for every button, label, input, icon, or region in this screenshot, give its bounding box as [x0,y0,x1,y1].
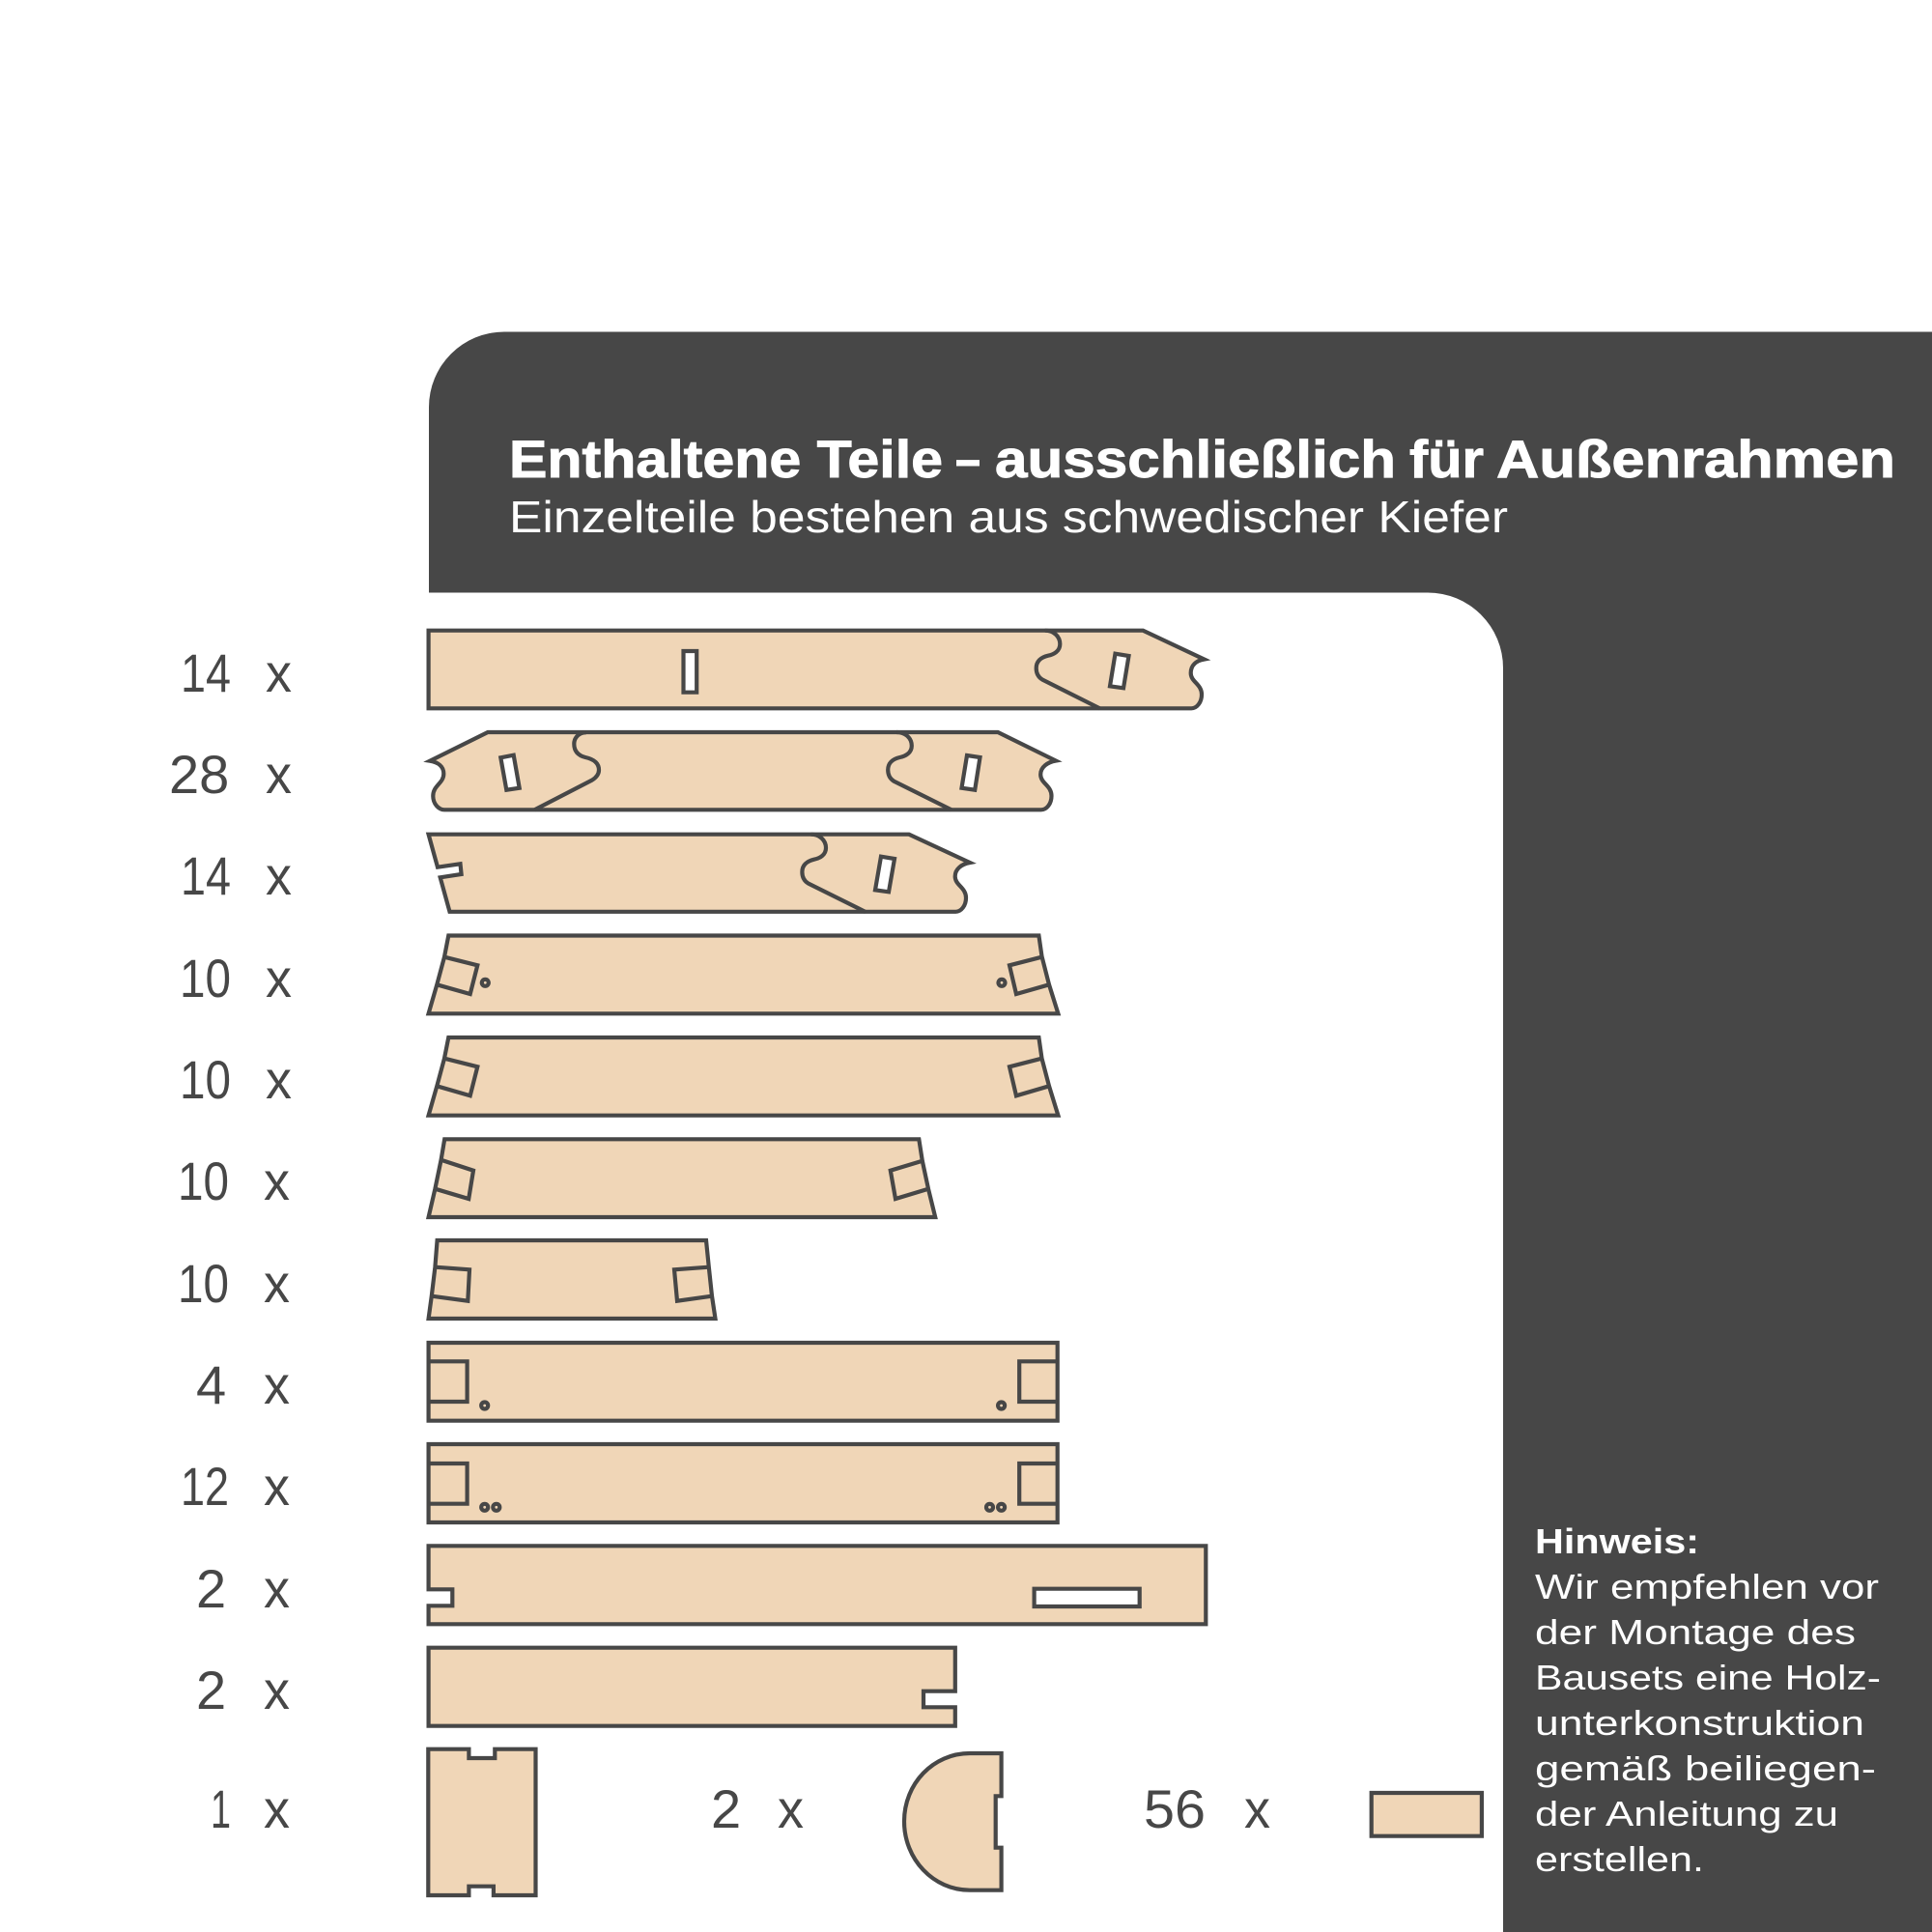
label: 10 x: 10 [178,1253,229,1314]
label: 14 x [181,642,292,703]
note text block [1535,1521,1881,1879]
label: 4 x: x [264,1354,290,1415]
label: 28 x [169,744,292,805]
title: – [955,429,980,489]
label: 10 x: x [264,1253,290,1314]
title: Außenrahmen [1496,429,1895,489]
note text block: Bausets eine Holz- [1535,1658,1881,1697]
label: 56 x: 56 [1144,1778,1206,1839]
label: 10 x [178,1151,290,1211]
note text block: erstellen. [1535,1839,1704,1879]
label: 2 x [196,1660,290,1720]
piece 3: board with notch and angled end [429,835,970,912]
title [509,429,1895,489]
label: 56 x: x [1244,1778,1270,1839]
piece 12: short block with notches [428,1749,535,1895]
label: 2 x: 2 [196,1660,226,1720]
note text block: gemäß beiliegen- [1535,1748,1876,1788]
piece 11: board with notch on right [429,1648,955,1726]
label: 2 x: 2 [196,1558,226,1619]
note text block: Wir empfehlen vor [1535,1567,1879,1606]
title: Enthaltene Teile [509,429,943,489]
note text block: unterkonstruktion [1535,1703,1864,1743]
label: 2 x [196,1558,290,1619]
label: 10 x [180,1049,292,1110]
piece 2: board with two angled ends [430,732,1056,810]
label: 10 x [180,948,292,1009]
label: 10 x [178,1253,290,1314]
piece 13: half-round block [904,1753,1002,1890]
label: 1 x: x [264,1778,290,1839]
piece 8: rectangular board with single holes [429,1343,1058,1421]
title: für [1409,429,1484,489]
piece 6: shorter trapezoid board [429,1139,935,1217]
label: 2 x: x [778,1778,804,1839]
label: 28 x: 28 [169,744,229,805]
note text block: Hinweis: [1535,1521,1699,1561]
label: 2 x: x [264,1558,290,1619]
piece 14: small rectangle [1372,1793,1482,1836]
note text block: der Anleitung zu [1535,1794,1838,1833]
piece 1: long board with angled end [429,631,1205,708]
label: 10 x: x [266,1049,292,1110]
label: 2 x [711,1778,804,1839]
label: 10 x: x [266,948,292,1009]
title: ausschließlich [995,429,1396,489]
piece 5: trapezoid board [429,1037,1058,1116]
label: 4 x: 4 [196,1354,226,1415]
label: 14 x [181,845,292,906]
piece 7: shortest trapezoid board [429,1240,715,1319]
label: 10 x: 10 [178,1151,229,1211]
panel: dark L-shaped frame [429,332,1932,1932]
piece 9: rectangular board with double holes [429,1444,1058,1522]
label: 14 x: x [266,642,292,703]
piece 10: long board with slot and notch [429,1546,1206,1624]
label: 10 x: x [264,1151,290,1211]
piece 4: trapezoid board with holes [429,935,1058,1013]
note text block: der Montage des [1535,1612,1856,1652]
label: 10 x: 10 [180,1049,231,1110]
label: 4 x [196,1354,290,1415]
label: 2 x: x [264,1660,290,1720]
label: 14 x: x [266,845,292,906]
label: 12 x: x [264,1456,290,1517]
label: 14 x: 14 [181,642,231,703]
label: 28 x: x [266,744,292,805]
label: 56 x [1144,1778,1270,1839]
label: 1 x: 1 [211,1778,231,1839]
subtitle: Einzelteile bestehen aus schwedischer Kiefer [509,492,1508,542]
label: 12 x: 12 [181,1456,229,1517]
label: 2 x: 2 [711,1778,741,1839]
label: 10 x: 10 [180,948,231,1009]
label: 12 x [181,1456,290,1517]
label: 1 x [211,1778,290,1839]
label: 14 x: 14 [181,845,231,906]
